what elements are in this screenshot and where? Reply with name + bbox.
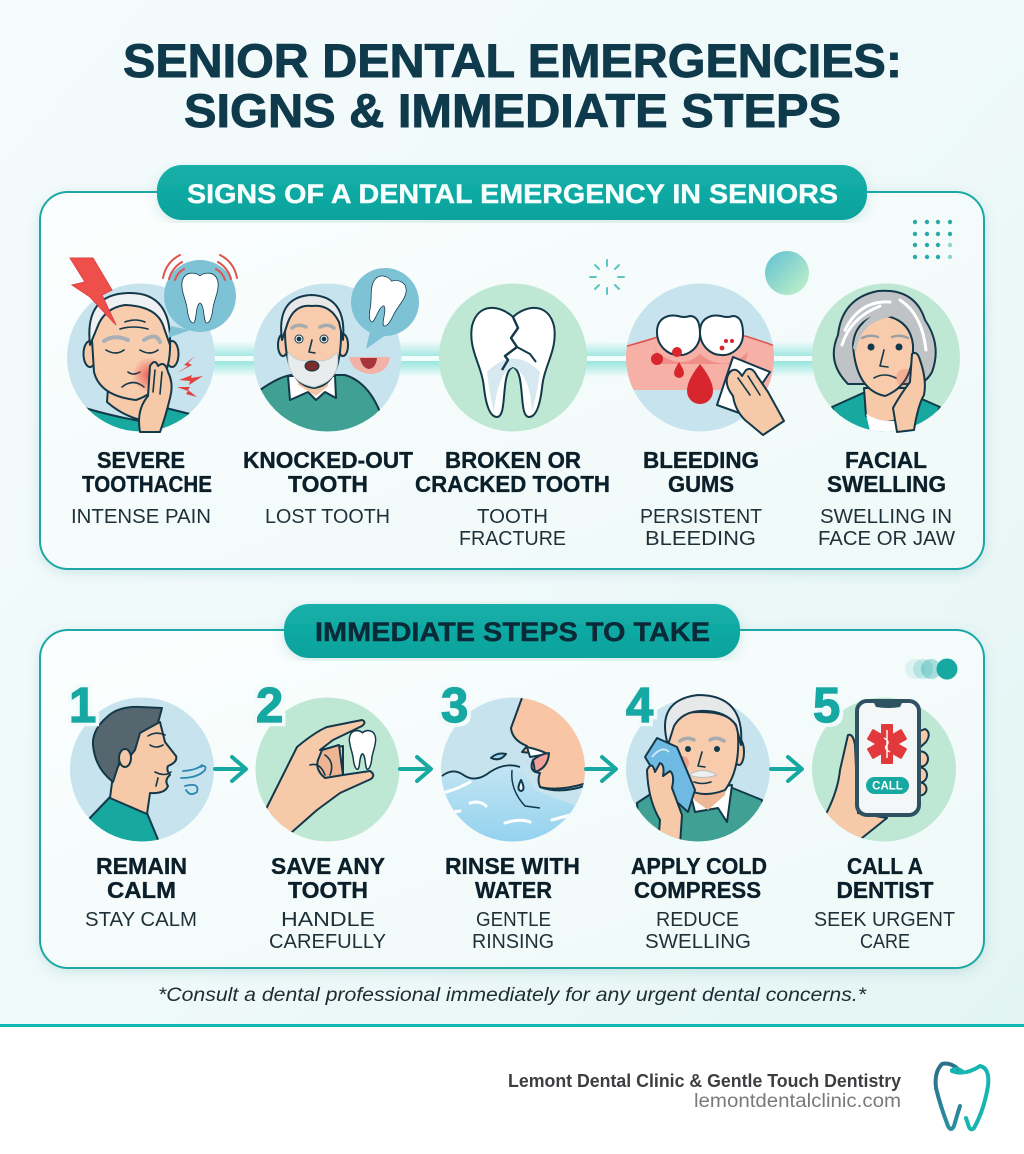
arrow 1 [215, 757, 246, 781]
disclaimer note: *Consult a dental professional immediately for any urgent dental concerns.* [158, 985, 867, 1006]
icon: apply cold compress [626, 695, 770, 850]
heading pill: signs [157, 165, 867, 220]
labels: call a dentist: SEEK URGENT [814, 909, 955, 931]
arrow 4 [771, 757, 802, 781]
panel: signs of a dental emergency [40, 192, 984, 569]
labels: save any tooth: CAREFULLY [269, 931, 386, 953]
icon: knocked-out tooth [254, 268, 419, 440]
number 4: 4 [626, 679, 653, 733]
labels: broken or cracked tooth [415, 447, 610, 550]
heading pill: immediate steps: IMMEDIATE STEPS TO TAKE [315, 617, 710, 647]
heading pill: signs: SIGNS OF A DENTAL EMERGENCY IN SENIORS [187, 179, 838, 209]
labels: bleeding gums: BLEEDING [643, 447, 759, 473]
labels: knocked-out tooth: KNOCKED-OUT [243, 447, 413, 473]
labels: broken or cracked tooth: FRACTURE [459, 528, 566, 550]
decorative dot grid [913, 220, 952, 259]
labels: rinse with water: GENTLE [476, 909, 551, 931]
panel: immediate steps [40, 630, 984, 968]
footer [0, 1024, 1024, 1154]
labels: call a dentist: DENTIST [836, 877, 934, 903]
gum gap [349, 357, 390, 374]
labels: severe toothache: TOOTHACHE [82, 471, 212, 497]
labels: rinse with water: WATER [475, 877, 552, 903]
title: SENIOR DENTAL EMERGENCIES: [123, 34, 902, 87]
arrow 3 [586, 757, 616, 781]
labels: knocked-out tooth [243, 447, 413, 528]
labels: call a dentist [814, 853, 955, 953]
labels: apply cold compress: APPLY COLD [631, 853, 767, 879]
labels: facial swelling: FACIAL [845, 447, 927, 473]
logo: tooth [936, 1064, 988, 1129]
labels: save any tooth: TOOTH [288, 877, 368, 903]
icon: severe toothache [67, 255, 237, 450]
labels: severe toothache: INTENSE PAIN [71, 506, 211, 528]
icon: broken or cracked tooth [439, 284, 587, 432]
connector glow line [214, 341, 814, 377]
number 5: 5 [813, 679, 840, 733]
napkin and hand [717, 357, 770, 414]
labels: severe toothache: SEVERE [97, 447, 185, 473]
labels: bleeding gums: GUMS [668, 471, 734, 497]
clinic name and url: lemontdentalclinic.com [694, 1091, 901, 1112]
labels: apply cold compress: COMPRESS [634, 877, 761, 903]
icon: facial swelling [812, 284, 960, 440]
number 3: 3 [441, 679, 468, 733]
decorative gradient orb [765, 251, 809, 295]
icon: rinse with water [441, 698, 585, 842]
labels: facial swelling: FACE OR JAW [818, 528, 955, 550]
labels: remain calm [85, 853, 197, 931]
title: SIGNS & IMMEDIATE STEPS [184, 84, 841, 137]
lightning bolt [70, 258, 116, 325]
clinic name and url: Lemont Dental Clinic & Gentle Touch Dentistry [508, 1071, 901, 1091]
number 2: 2 [256, 679, 283, 733]
labels: facial swelling: SWELLING [827, 471, 946, 497]
clinic name and url [508, 1071, 901, 1112]
decorative sunburst [590, 260, 624, 294]
labels: bleeding gums: BLEEDING [645, 528, 756, 550]
labels: broken or cracked tooth: TOOTH [477, 506, 548, 528]
call button: CALL [872, 780, 903, 792]
ice pack [645, 738, 695, 812]
labels: knocked-out tooth: TOOTH [288, 471, 368, 497]
labels: facial swelling: SWELLING IN [820, 506, 952, 528]
bubble [366, 322, 390, 349]
labels: remain calm: REMAIN [96, 853, 187, 879]
call button [866, 777, 909, 794]
heading pill: immediate steps [284, 604, 740, 658]
labels: apply cold compress [631, 853, 767, 953]
labels: broken or cracked tooth: BROKEN OR [445, 447, 581, 473]
medical star [867, 724, 907, 764]
icon: bleeding gums [620, 284, 784, 435]
labels: save any tooth: HANDLE [281, 909, 375, 931]
number 1: 1 [69, 679, 96, 733]
hand holding ice pack [647, 763, 682, 845]
labels: save any tooth [269, 853, 386, 953]
labels: apply cold compress: REDUCE [656, 909, 739, 931]
labels: severe toothache [71, 447, 212, 528]
labels: knocked-out tooth: LOST TOOTH [265, 506, 390, 528]
labels: rinse with water: RINSE WITH [445, 853, 580, 879]
pain sparks [177, 356, 203, 397]
labels: broken or cracked tooth: CRACKED TOOTH [415, 471, 610, 497]
labels: facial swelling [818, 447, 955, 550]
decorative trailing dots [905, 658, 958, 680]
labels: rinse with water: RINSING [472, 931, 554, 953]
labels: call a dentist: CARE [860, 931, 910, 953]
pain waves [163, 255, 237, 280]
labels: save any tooth: SAVE ANY [271, 853, 385, 879]
labels: apply cold compress: SWELLING [645, 931, 751, 953]
icon: call a dentist [812, 698, 956, 850]
phone [857, 701, 919, 815]
icon: remain calm [70, 698, 214, 850]
labels: bleeding gums [640, 447, 762, 550]
icon: save any tooth [256, 698, 400, 842]
labels: call a dentist: CALL A [847, 853, 923, 879]
title [123, 34, 902, 137]
labels: bleeding gums: PERSISTENT [640, 506, 762, 528]
labels: remain calm: CALM [107, 877, 176, 903]
bubble with tooth [168, 326, 190, 338]
labels: rinse with water [445, 853, 580, 953]
arrow 2 [400, 757, 431, 781]
labels: remain calm: STAY CALM [85, 909, 197, 931]
